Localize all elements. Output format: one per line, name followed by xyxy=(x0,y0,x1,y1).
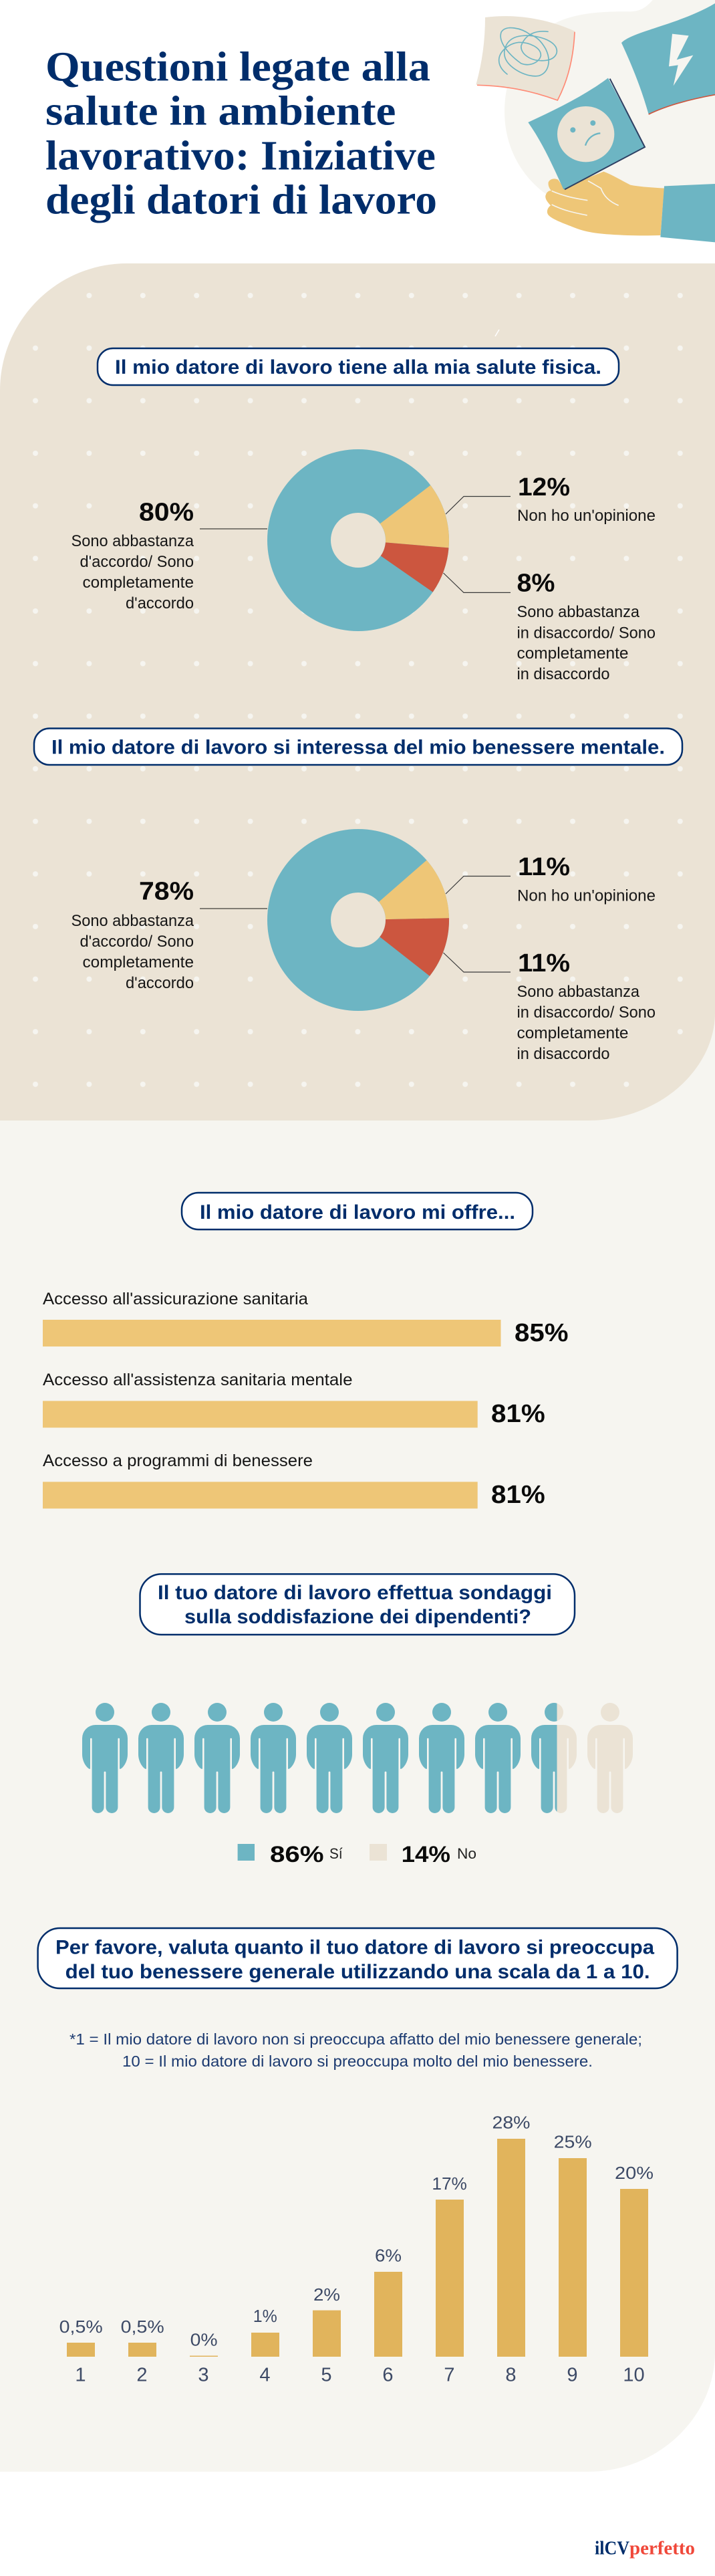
axis labels: 7 xyxy=(444,2365,455,2386)
callout: 80% agree xyxy=(71,499,267,612)
callout: 11% disagree: in disaccordo xyxy=(517,1045,609,1063)
logo: perfetto xyxy=(629,2539,695,2559)
header illustration xyxy=(476,0,715,242)
value labels: 0,5% xyxy=(59,2317,103,2337)
axis labels: 6 xyxy=(382,2365,394,2386)
heading: rating scale question: Per favore, valuta quanto il tuo datore di lavoro si preoccupa xyxy=(55,1937,654,1959)
axis labels: 3 xyxy=(198,2365,209,2386)
value labels: 20% xyxy=(615,2163,654,2183)
heading: mental wellbeing: Il mio datore di lavoro si interessa del mio benessere mentale. xyxy=(51,737,665,758)
bar chart: rating 1 to 10 xyxy=(59,2113,654,2386)
bar: wellness programs 81%: 81% xyxy=(491,1481,545,1509)
heading: mental wellbeing xyxy=(34,729,682,765)
callout: 8% disagree: in disaccordo xyxy=(517,665,609,683)
bar: health insurance 85%: 85% xyxy=(515,1319,568,1347)
title: lavorativo: Iniziative xyxy=(45,133,436,179)
sleeve xyxy=(660,184,715,242)
axis labels: 10 xyxy=(623,2365,645,2386)
heading: employer offers xyxy=(182,1193,533,1230)
bar: wellness programs 81%: Accesso a programmi di benessere xyxy=(43,1451,313,1470)
hand holding paper xyxy=(545,172,664,235)
callout: 78% agree: 78% xyxy=(139,878,194,906)
callout: 11% no opinion: 11% xyxy=(518,853,570,881)
heading: rating scale question: del tuo benessere generale utilizzando una scala da 1 a 10. xyxy=(65,1961,650,1983)
paper with lightning bolt xyxy=(621,3,715,114)
note: scale explanation: 10 = Il mio datore di lavoro si preoccupa molto del mio benessere. xyxy=(122,2053,593,2070)
value labels: 0% xyxy=(190,2330,218,2350)
bar: mental healthcare 81%: 81% xyxy=(491,1400,545,1428)
value labels: 1% xyxy=(253,2306,277,2326)
callout: 11% disagree: in disaccordo/ Sono xyxy=(517,1004,656,1022)
cream background section xyxy=(0,1003,715,2472)
callout: 8% disagree: in disaccordo/ Sono xyxy=(517,624,656,642)
axis labels xyxy=(75,2365,645,2386)
title: Questioni legate alla xyxy=(45,45,430,90)
callout: 78% agree xyxy=(71,878,267,992)
legend: yes / no: Sí xyxy=(329,1845,343,1862)
bar chart: employer offers xyxy=(43,1290,568,1509)
heading: physical health: Il mio datore di lavoro tiene alla mia salute fisica. xyxy=(115,356,601,378)
heading: rating scale question xyxy=(38,1928,678,1988)
callout: 8% disagree: completamente xyxy=(517,645,628,663)
legend: yes / no: 14% xyxy=(402,1842,450,1867)
callout: 8% disagree: 8% xyxy=(517,570,555,598)
heading: satisfaction surveys: sulla soddisfazione dei dipendenti? xyxy=(184,1606,531,1628)
callout: 8% disagree: Sono abbastanza xyxy=(517,603,640,621)
paper with sad face xyxy=(528,78,645,189)
pie chart: physical health xyxy=(267,449,449,631)
callout: 12% no opinion: Non ho un'opinione xyxy=(517,507,656,525)
legend: yes / no: 86% xyxy=(270,1842,324,1867)
callout: 12% no opinion xyxy=(446,473,656,525)
bar: mental healthcare 81%: Accesso all'assistenza sanitaria mentale xyxy=(43,1371,353,1389)
callout: 78% agree: d'accordo/ Sono xyxy=(80,933,194,951)
bars xyxy=(67,2139,648,2357)
callout: 80% agree: completamente xyxy=(83,574,194,592)
callout: 78% agree: Sono abbastanza xyxy=(71,912,194,930)
bar: wellness programs 81% xyxy=(43,1451,545,1509)
callout: 78% agree: d'accordo xyxy=(126,974,194,992)
value labels: 2% xyxy=(313,2285,340,2305)
callout: 80% agree: 80% xyxy=(139,499,194,527)
heading: employer offers: Il mio datore di lavoro mi offre... xyxy=(200,1201,515,1223)
logo: ilCV xyxy=(595,2539,629,2559)
axis labels: 9 xyxy=(567,2365,578,2386)
callout: 11% no opinion: Non ho un'opinione xyxy=(517,887,656,905)
value labels: 0,5% xyxy=(121,2317,164,2337)
title: salute in ambiente xyxy=(45,89,396,134)
note: scale explanation xyxy=(69,2030,642,2070)
axis labels: 4 xyxy=(259,2365,271,2386)
callout: 80% agree: d'accordo xyxy=(126,594,194,612)
axis labels: 8 xyxy=(505,2365,517,2386)
legend: yes / no: No xyxy=(457,1845,476,1862)
callout: 8% disagree xyxy=(444,570,656,683)
pictogram: people 86% yes, 14% no xyxy=(82,1703,633,1813)
bar: mental healthcare 81% xyxy=(43,1371,545,1428)
callout: 11% disagree: Sono abbastanza xyxy=(517,983,640,1001)
value labels: 28% xyxy=(492,2113,531,2133)
heading: satisfaction surveys xyxy=(140,1574,575,1635)
heading: physical health xyxy=(98,348,619,385)
heading: satisfaction surveys: Il tuo datore di lavoro effettua sondaggi xyxy=(158,1582,552,1604)
value labels: 17% xyxy=(432,2174,467,2194)
bar: health insurance 85% xyxy=(43,1290,568,1347)
title xyxy=(45,45,437,223)
callout: 11% disagree xyxy=(444,949,656,1063)
axis labels: 1 xyxy=(75,2365,86,2386)
illustration background blob xyxy=(505,0,715,194)
legend: yes / no xyxy=(238,1842,476,1867)
axis labels: 2 xyxy=(136,2365,148,2386)
callout: 11% disagree: completamente xyxy=(517,1024,628,1042)
paper with scribble xyxy=(476,16,575,100)
callout: 12% no opinion: 12% xyxy=(518,473,570,501)
pie chart: mental wellbeing xyxy=(267,829,449,1011)
callout: 11% no opinion xyxy=(446,853,656,905)
callout: 80% agree: d'accordo/ Sono xyxy=(80,553,194,571)
bar: health insurance 85%: Accesso all'assicurazione sanitaria xyxy=(43,1290,308,1308)
note: scale explanation: *1 = Il mio datore di lavoro non si preoccupa affatto del mio benessere generale; xyxy=(69,2030,642,2048)
logo xyxy=(595,2539,695,2559)
axis labels: 5 xyxy=(321,2365,332,2386)
callout: 78% agree: completamente xyxy=(83,953,194,971)
value labels: 25% xyxy=(554,2132,592,2152)
callout: 11% disagree: 11% xyxy=(518,949,570,977)
panel: employer care pies xyxy=(0,263,715,1121)
callout: 80% agree: Sono abbastanza xyxy=(71,532,194,550)
value labels: 6% xyxy=(375,2246,402,2266)
value labels xyxy=(59,2113,654,2350)
title: degli datori di lavoro xyxy=(45,177,437,223)
